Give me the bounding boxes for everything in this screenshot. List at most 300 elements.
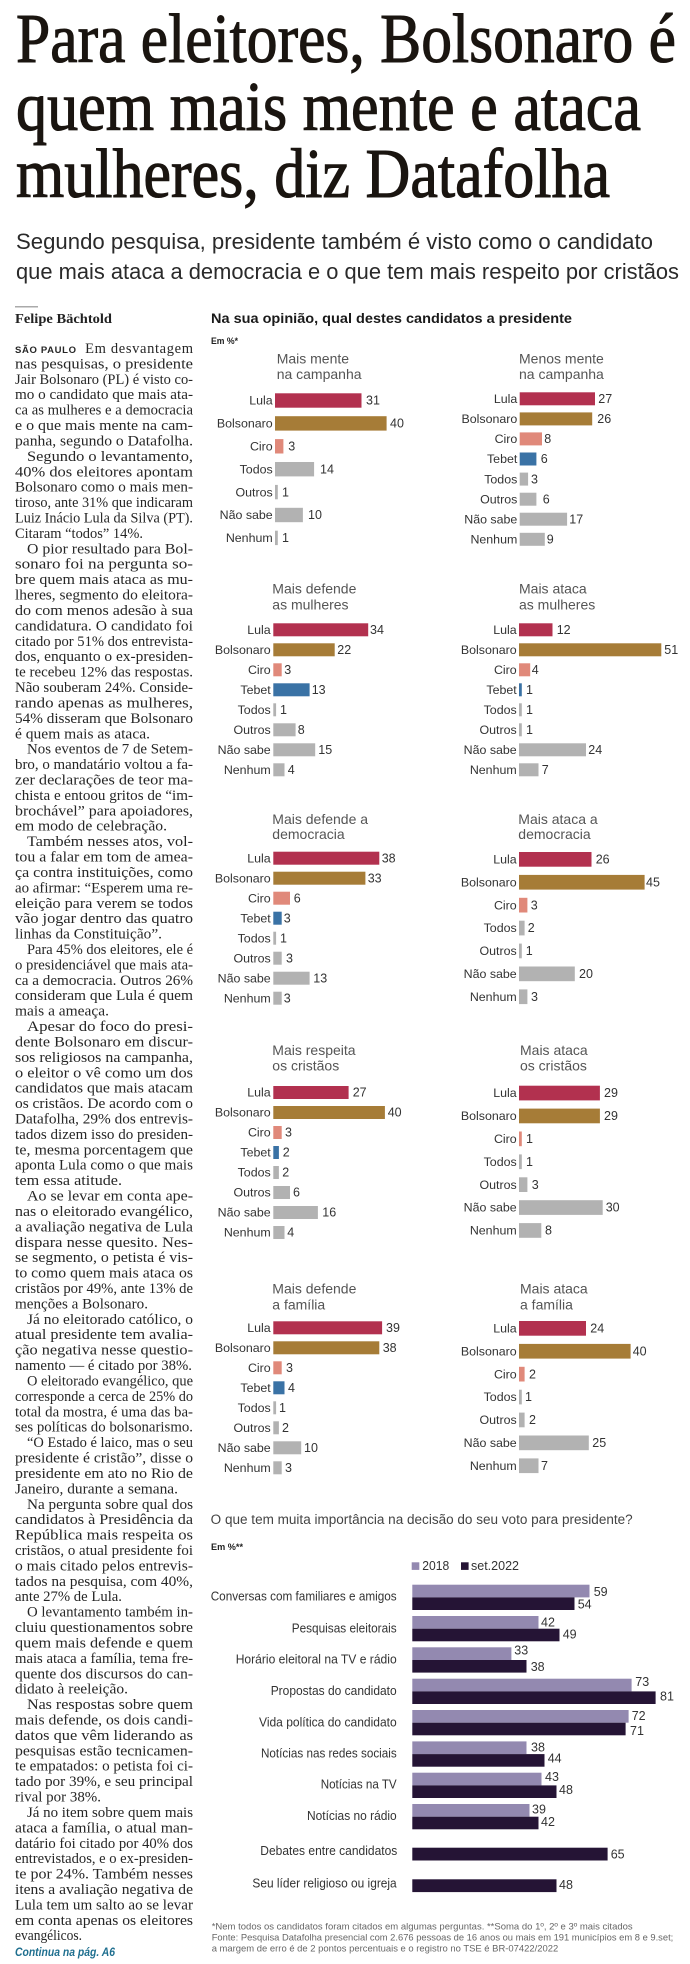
article text: República mais respeita os bbox=[15, 1528, 193, 1544]
article text: Luiz Inácio Lula da Silva (PT). bbox=[15, 510, 193, 526]
chart: Mais ataca a família: 7 bbox=[541, 1459, 548, 1473]
article text: sonaro foi na pergunta so- bbox=[15, 557, 193, 573]
article text: te recebeu 12% das respostas. bbox=[15, 665, 193, 681]
chart: Menos mente na campanha: 6 bbox=[543, 492, 550, 506]
chart: Mais respeita os cristãos: Nenhum bbox=[224, 1226, 271, 1240]
chart: Mais mente na campanha: 40 bbox=[390, 417, 404, 431]
chart: Mais ataca os cristãos: os cristãos bbox=[520, 1058, 587, 1074]
chart: importância na decisão do voto: 73 bbox=[635, 1675, 649, 1689]
article text: pesquisas estão tecnicamen- bbox=[15, 1743, 193, 1759]
legend: 2018 bbox=[422, 1559, 449, 1573]
chart: Mais ataca as mulheres: Outros bbox=[480, 723, 517, 737]
article text: bre quem mais ataca as mu- bbox=[15, 572, 193, 588]
article text: datos que vêm liderando as bbox=[15, 1728, 193, 1744]
chart: Mais ataca a democracia: democracia bbox=[518, 826, 591, 842]
chart: Mais ataca as mulheres: as mulheres bbox=[519, 596, 595, 612]
chart: Mais defende a democracia: 3 bbox=[286, 951, 293, 965]
chart: Mais defende a família: Bolsonaro bbox=[215, 1341, 271, 1355]
chart: Mais mente na campanha: Ciro bbox=[250, 440, 273, 454]
chart: Mais defende a democracia: Não sabe bbox=[218, 971, 271, 985]
chart: importância na decisão do voto: Horário eleitoral na TV e rádio bbox=[236, 1653, 397, 1667]
chart: Mais ataca os cristãos: Não sabe bbox=[464, 1201, 517, 1215]
chart: Mais mente na campanha: 14 bbox=[320, 462, 334, 476]
chart: importância na decisão do voto bbox=[211, 1585, 674, 1892]
chart: Mais defende as mulheres: 22 bbox=[337, 643, 351, 657]
chart: Mais ataca as mulheres: 1 bbox=[526, 723, 533, 737]
footnote: a margem de erro é de 2 pontos percentuais e o registro no TSE é BR-07422/2022 bbox=[212, 1944, 558, 1955]
article text: namento — é citado por 38%. bbox=[15, 1358, 192, 1374]
chart: Mais ataca os cristãos: Nenhum bbox=[470, 1224, 517, 1238]
chart: Mais ataca as mulheres: 1 bbox=[526, 703, 533, 717]
chart: Mais defende as mulheres: Todos bbox=[238, 703, 271, 717]
chart: importância na decisão do voto: Notícias nas redes sociais bbox=[261, 1746, 397, 1760]
chart: Mais defende a família: Ciro bbox=[248, 1361, 271, 1375]
chart: Mais mente na campanha: Não sabe bbox=[220, 508, 273, 522]
article text: a avaliação negativa de Lula bbox=[15, 1219, 194, 1235]
chart: Mais defende a democracia: Outros bbox=[234, 951, 271, 965]
chart: Mais respeita os cristãos: 4 bbox=[287, 1226, 294, 1240]
chart: importância na decisão do voto: 59 bbox=[594, 1585, 608, 1599]
chart: Mais respeita os cristãos: Mais respeita bbox=[272, 1042, 356, 1058]
article text: é quem mais as ataca. bbox=[15, 726, 150, 742]
article text: e o que mais mente na cam- bbox=[15, 418, 193, 434]
chart: Mais defende a família: Nenhum bbox=[224, 1461, 271, 1475]
article text: O pior resultado para Bol- bbox=[27, 541, 193, 557]
chart: Mais ataca a democracia: 3 bbox=[531, 898, 538, 912]
chart: Mais mente na campanha: 1 bbox=[282, 485, 289, 499]
chart: Mais ataca a família: Nenhum bbox=[470, 1459, 517, 1473]
article text: ca a democracia. Outros 26% bbox=[15, 973, 193, 989]
article text: zer declarações de teor ma- bbox=[15, 772, 193, 788]
chart: Mais mente na campanha: Todos bbox=[240, 462, 273, 476]
chart: Mais ataca os cristãos: Bolsonaro bbox=[461, 1109, 517, 1123]
chart: Mais ataca as mulheres: 12 bbox=[557, 623, 571, 637]
chart: Mais mente na campanha: 1 bbox=[282, 531, 289, 545]
chart: Mais respeita os cristãos bbox=[215, 1042, 402, 1240]
article text: rival por 38%. bbox=[15, 1790, 101, 1806]
chart: Mais mente na campanha: 3 bbox=[288, 440, 295, 454]
chart: Mais mente na campanha: na campanha bbox=[277, 366, 362, 382]
chart: importância na decisão do voto: 48 bbox=[559, 1878, 573, 1892]
chart: Menos mente na campanha: Menos mente bbox=[519, 350, 604, 366]
chart: Mais defende a família: a família bbox=[272, 1296, 325, 1312]
chart: Mais ataca a família: 40 bbox=[633, 1344, 647, 1358]
article text: to como quem mais ataca os bbox=[15, 1266, 193, 1282]
chart: importância na decisão do voto: Notícias na TV bbox=[321, 1778, 397, 1792]
article text: linhas da Constituição”. bbox=[15, 927, 162, 943]
article text: tado por 39%, e seu principal bbox=[15, 1774, 193, 1790]
article text: te empatados: o petista foi ci- bbox=[15, 1759, 193, 1775]
chart: Mais respeita os cristãos: Bolsonaro bbox=[215, 1106, 271, 1120]
chart: importância na decisão do voto: 72 bbox=[632, 1709, 646, 1723]
article text: rando apenas as mulheres, bbox=[15, 695, 193, 711]
chart: Mais mente na campanha: Outros bbox=[236, 485, 273, 499]
chart: Mais ataca a família: 1 bbox=[525, 1390, 532, 1404]
chart: importância na decisão do voto: Seu líder religioso ou igreja bbox=[252, 1876, 397, 1890]
article text: menções a Bolsonaro. bbox=[15, 1296, 148, 1312]
chart: importância na decisão do voto: 33 bbox=[514, 1643, 528, 1657]
chart: Mais ataca a democracia: 20 bbox=[579, 967, 593, 981]
article text: tiroso, ante 31% que indicaram bbox=[15, 495, 194, 511]
article text: mais a ameaça. bbox=[15, 1004, 109, 1020]
article text: tados na pesquisa, com 40%, bbox=[15, 1574, 193, 1590]
chart: Menos mente na campanha: Outros bbox=[480, 492, 517, 506]
footnote: Fonte: Pesquisa Datafolha presencial com 2.676 pessoas de 16 anos ou mais em 191 municípios em 8 e 9.set; bbox=[212, 1933, 673, 1944]
chart: Mais ataca a família: Bolsonaro bbox=[461, 1344, 517, 1358]
subtitle: Segundo pesquisa, presidente também é visto como o candidato bbox=[16, 229, 653, 254]
chart: importância na decisão do voto: 81 bbox=[660, 1690, 674, 1704]
second chart unit note: Em %** bbox=[211, 1542, 244, 1552]
chart: Mais ataca os cristãos: Todos bbox=[484, 1155, 517, 1169]
article text: cristãos, o atual presidente foi bbox=[15, 1543, 193, 1559]
chart: Mais defende as mulheres: 34 bbox=[370, 623, 384, 637]
chart: Menos mente na campanha: 9 bbox=[547, 532, 554, 546]
chart: Mais defende a democracia: 38 bbox=[382, 851, 396, 865]
article text: ça contra instituições, como bbox=[15, 865, 193, 881]
chart: Mais defende a família: 38 bbox=[383, 1341, 397, 1355]
chart: Mais ataca a família: 2 bbox=[529, 1367, 536, 1381]
article text: presidente é cristão”, disse o bbox=[15, 1450, 193, 1466]
chart: importância na decisão do voto: 42 bbox=[541, 1616, 555, 1630]
chart: Mais ataca os cristãos: 3 bbox=[532, 1178, 539, 1192]
chart: Mais ataca a família: Ciro bbox=[494, 1367, 517, 1381]
article text: dos, enquanto o ex-presiden- bbox=[15, 649, 193, 665]
chart: Menos mente na campanha: Ciro bbox=[495, 432, 517, 446]
article text: chista e entoou gritos de “im- bbox=[15, 788, 193, 804]
chart: Mais respeita os cristãos: 27 bbox=[353, 1086, 367, 1100]
chart: Mais defende as mulheres: Não sabe bbox=[218, 743, 271, 757]
chart: Mais defende a democracia: 33 bbox=[368, 871, 382, 885]
article text: dente Bolsonaro em discur- bbox=[15, 1034, 193, 1050]
chart: Mais defende as mulheres: as mulheres bbox=[272, 596, 349, 612]
article text: em conta apenas os eleitores bbox=[15, 1913, 193, 1929]
chart: Mais defende as mulheres: 8 bbox=[298, 723, 305, 737]
chart: Menos mente na campanha bbox=[462, 350, 612, 546]
chart: Mais ataca os cristãos: Lula bbox=[493, 1086, 517, 1100]
chart: Mais defende as mulheres: 15 bbox=[318, 743, 332, 757]
chart: Mais ataca a família: 2 bbox=[529, 1413, 536, 1427]
chart: Mais ataca os cristãos: 29 bbox=[604, 1109, 618, 1123]
chart: Mais defende a democracia: Tebet bbox=[240, 911, 271, 925]
byline bbox=[15, 306, 112, 327]
chart: Mais ataca as mulheres: Lula bbox=[493, 623, 517, 637]
chart: Mais defende as mulheres: Nenhum bbox=[224, 763, 271, 777]
chart: Mais ataca a democracia: Lula bbox=[493, 852, 517, 866]
article text: Já no item sobre quem mais bbox=[27, 1805, 193, 1821]
chart: Mais defende a democracia: 1 bbox=[280, 931, 287, 945]
chart: Mais mente na campanha: 31 bbox=[366, 394, 380, 408]
chart: Mais ataca a democracia: Nenhum bbox=[470, 990, 517, 1004]
chart: Mais defende a família: Não sabe bbox=[218, 1441, 271, 1455]
article text: didato à reeleição. bbox=[15, 1682, 128, 1698]
article text: SÃO PAULO Em desvantagem bbox=[15, 341, 194, 357]
chart: Menos mente na campanha: 8 bbox=[544, 432, 551, 446]
chart: Mais ataca as mulheres: Nenhum bbox=[470, 763, 517, 777]
article text: itens a avaliação negativa de bbox=[15, 1882, 193, 1898]
article text: atual presidente tem avalia- bbox=[15, 1327, 193, 1343]
chart: Mais ataca a família: a família bbox=[520, 1296, 573, 1312]
article text: cluiu questionamentos sobre bbox=[15, 1620, 193, 1636]
article text: do com menos adesão à sua bbox=[15, 603, 194, 619]
article text: 40% dos eleitores apontam bbox=[15, 464, 194, 480]
chart: Mais ataca as mulheres: Bolsonaro bbox=[461, 643, 517, 657]
chart: Mais defende as mulheres: Outros bbox=[234, 723, 271, 737]
chart: Menos mente na campanha: Lula bbox=[494, 392, 517, 406]
article text: entrevistados, e o ex-presiden- bbox=[15, 1851, 193, 1867]
chart: Menos mente na campanha: Bolsonaro bbox=[462, 412, 517, 426]
chart: Mais respeita os cristãos: 2 bbox=[282, 1166, 289, 1180]
article text: o eleitor o vê como um dos bbox=[15, 1065, 193, 1081]
chart: Mais defende a democracia: Lula bbox=[247, 851, 271, 865]
chart: importância na decisão do voto: 71 bbox=[630, 1724, 644, 1738]
chart: Mais defende a democracia bbox=[215, 811, 396, 1005]
chart: Mais ataca os cristãos: 29 bbox=[604, 1086, 618, 1100]
chart: Mais defende as mulheres: Tebet bbox=[240, 683, 271, 697]
chart: Mais ataca as mulheres: 24 bbox=[588, 743, 602, 757]
article text: quem mais defende e quem bbox=[15, 1635, 194, 1651]
chart: Mais defende a democracia: Bolsonaro bbox=[215, 871, 271, 885]
chart: Mais ataca a família: Não sabe bbox=[464, 1436, 517, 1450]
article text: em modo de celebração. bbox=[15, 819, 167, 835]
article text: Na pergunta sobre qual dos bbox=[27, 1497, 193, 1513]
chart: Mais defende a família: 3 bbox=[285, 1461, 292, 1475]
chart: importância na decisão do voto: 42 bbox=[541, 1815, 555, 1829]
chart: Mais defende as mulheres: 1 bbox=[280, 703, 287, 717]
article text: ataca a família, o atual man- bbox=[15, 1820, 193, 1836]
article text: Jair Bolsonaro (PL) é visto co- bbox=[15, 372, 193, 388]
article text: tou a falar em tom de amea- bbox=[15, 850, 193, 866]
chart: Mais ataca os cristãos: 8 bbox=[545, 1224, 552, 1238]
article text: panha, segundo o Datafolha. bbox=[15, 434, 193, 450]
article text: Nas respostas sobre quem bbox=[27, 1697, 194, 1713]
chart: importância na decisão do voto: 49 bbox=[563, 1628, 577, 1642]
chart: Mais respeita os cristãos: Lula bbox=[247, 1086, 271, 1100]
footnote bbox=[212, 1921, 673, 1955]
chart: Mais respeita os cristãos: 2 bbox=[283, 1146, 290, 1160]
article text: te por 24%. Também nesses bbox=[15, 1867, 193, 1883]
article text: Ao se levar em conta ape- bbox=[27, 1189, 193, 1205]
article text: quente dos discursos do can- bbox=[15, 1666, 193, 1682]
chart section heading: Na sua opinião, qual destes candidatos a presidente bbox=[211, 310, 572, 326]
article text: tem essa atitude. bbox=[15, 1173, 122, 1189]
article text: Lula tem um salto ao se levar bbox=[15, 1897, 193, 1913]
second chart heading: O que tem muita importância na decisão do seu voto para presidente? bbox=[211, 1512, 633, 1527]
article text: consideram que Lula é quem bbox=[15, 988, 194, 1004]
chart: Mais ataca a democracia: 3 bbox=[531, 990, 538, 1004]
article text: 54% disseram que Bolsonaro bbox=[15, 711, 193, 727]
chart: Mais ataca os cristãos: Ciro bbox=[494, 1132, 517, 1146]
chart: Mais ataca a democracia: Bolsonaro bbox=[461, 875, 517, 889]
chart: Mais defende a família: Outros bbox=[234, 1421, 271, 1435]
chart: Mais defende a família: Mais defende bbox=[272, 1280, 357, 1296]
chart: Mais respeita os cristãos: Outros bbox=[234, 1186, 271, 1200]
chart: Mais mente na campanha: Bolsonaro bbox=[217, 417, 273, 431]
article text: ante 27% de Lula. bbox=[15, 1589, 122, 1605]
unit note: Em %* bbox=[211, 336, 238, 346]
chart: Menos mente na campanha: Nenhum bbox=[470, 532, 517, 546]
chart: Mais defende a democracia: Ciro bbox=[248, 891, 271, 905]
chart: Mais mente na campanha: Mais mente bbox=[277, 350, 349, 366]
article text: ção negativa nesse questio- bbox=[15, 1343, 193, 1359]
chart: Mais respeita os cristãos: 16 bbox=[322, 1206, 336, 1220]
chart: importância na decisão do voto: Debates entre candidatos bbox=[260, 1844, 397, 1858]
article text: Também nesses atos, vol- bbox=[27, 834, 193, 850]
byline: Felipe Bächtold bbox=[15, 312, 112, 327]
article text: datário foi citado por 40% dos bbox=[15, 1836, 193, 1852]
article text: dispara nesse quesito. Nes- bbox=[15, 1235, 193, 1251]
article text: Datafolha, 29% dos entrevis- bbox=[15, 1112, 193, 1128]
chart: importância na decisão do voto: 54 bbox=[578, 1597, 592, 1611]
chart: Mais defende as mulheres: 3 bbox=[284, 663, 291, 677]
continuation note: Continua na pág. A6 bbox=[15, 1945, 115, 1959]
chart: Mais ataca a família: 24 bbox=[590, 1322, 604, 1336]
chart: Mais defende as mulheres bbox=[215, 580, 384, 777]
article text: o mais citado pelos entrevis- bbox=[15, 1558, 193, 1574]
article text: mo o candidato que mais ata- bbox=[15, 387, 193, 403]
subtitle: que mais ataca a democracia e o que tem mais respeito por cristãos bbox=[16, 259, 679, 284]
chart: importância na decisão do voto: 44 bbox=[548, 1752, 562, 1766]
chart: Mais ataca a democracia: 45 bbox=[646, 875, 660, 889]
chart: Mais ataca os cristãos: 1 bbox=[526, 1155, 533, 1169]
title bbox=[16, 1, 676, 213]
chart: Mais ataca as mulheres: Ciro bbox=[494, 663, 517, 677]
chart: Mais defende a democracia: 13 bbox=[313, 971, 327, 985]
article text: bro, o mandatário voltou a fa- bbox=[15, 757, 193, 773]
chart: Mais ataca os cristãos: 30 bbox=[606, 1201, 620, 1215]
chart: Mais respeita os cristãos: os cristãos bbox=[272, 1058, 339, 1074]
chart: Mais ataca os cristãos: Mais ataca bbox=[520, 1042, 588, 1058]
chart: Mais respeita os cristãos: 40 bbox=[388, 1106, 402, 1120]
chart: Mais ataca as mulheres: Tebet bbox=[486, 683, 517, 697]
chart: Mais ataca as mulheres bbox=[461, 580, 678, 777]
article text: candidatos à Presidência da bbox=[15, 1512, 194, 1528]
chart: Menos mente na campanha: na campanha bbox=[519, 366, 604, 382]
footnote: *Nem todos os candidatos foram citados em algumas perguntas. **Soma do 1º, 2º e 3º mais citados bbox=[212, 1921, 633, 1932]
chart: Mais defende as mulheres: Mais defende bbox=[272, 580, 357, 596]
article text: vão jogar dentro das quatro bbox=[15, 911, 193, 927]
article text: Para 45% dos eleitores, ele é bbox=[27, 942, 193, 958]
article text: total da mostra, é uma das ba- bbox=[15, 1404, 193, 1420]
chart: Mais ataca a família: Lula bbox=[493, 1322, 517, 1336]
legend: set.2022 bbox=[471, 1559, 519, 1573]
chart: Mais respeita os cristãos: Não sabe bbox=[218, 1206, 271, 1220]
chart: Menos mente na campanha: Tebet bbox=[487, 452, 518, 466]
chart: Menos mente na campanha: Não sabe bbox=[464, 512, 517, 526]
chart: Menos mente na campanha: 6 bbox=[541, 452, 548, 466]
article text: evangélicos. bbox=[15, 1928, 82, 1944]
chart: Mais ataca os cristãos: Outros bbox=[480, 1178, 517, 1192]
article text: o presidenciável que mais ata- bbox=[15, 957, 193, 973]
article text: candidatos que mais atacam bbox=[15, 1081, 194, 1097]
article text: “O Estado é laico, mas o seu bbox=[27, 1435, 193, 1451]
chart: Menos mente na campanha: 27 bbox=[598, 392, 612, 406]
article text: Janeiro, durante a semana. bbox=[15, 1481, 178, 1497]
chart: Mais mente na campanha: 10 bbox=[308, 508, 322, 522]
chart: Mais defende a família bbox=[215, 1280, 400, 1475]
chart: Mais defende a família: 10 bbox=[304, 1441, 318, 1455]
chart: Mais respeita os cristãos: Ciro bbox=[248, 1126, 271, 1140]
chart: importância na decisão do voto: Vida política do candidato bbox=[259, 1715, 397, 1729]
chart: Menos mente na campanha: 26 bbox=[597, 412, 611, 426]
chart: Mais respeita os cristãos: Todos bbox=[238, 1166, 271, 1180]
chart: importância na decisão do voto: 38 bbox=[531, 1741, 545, 1755]
chart: Mais defende a família: 4 bbox=[288, 1381, 295, 1395]
chart: importância na decisão do voto: 48 bbox=[559, 1783, 573, 1797]
chart: Mais ataca a democracia: 1 bbox=[526, 944, 533, 958]
article text: se segmento, o petista é vis- bbox=[15, 1250, 193, 1266]
chart: Mais defende a democracia: democracia bbox=[272, 826, 345, 842]
article text: Não souberam 24%. Conside- bbox=[15, 680, 193, 696]
article text: Bolsonaro como o mais men- bbox=[15, 480, 193, 496]
chart: Mais ataca as mulheres: 7 bbox=[542, 763, 549, 777]
article text: Nos eventos de 7 de Setem- bbox=[27, 742, 193, 758]
chart: Mais defende a família: 3 bbox=[286, 1361, 293, 1375]
article text: os cristãos. De acordo com o bbox=[15, 1096, 193, 1112]
chart: Mais defende a democracia: 3 bbox=[284, 991, 291, 1005]
article text: ses políticas do bolsonarismo. bbox=[15, 1420, 193, 1436]
chart: Mais ataca a família: 25 bbox=[592, 1436, 606, 1450]
chart: Mais ataca as mulheres: 51 bbox=[664, 643, 678, 657]
legend bbox=[412, 1559, 519, 1573]
chart: Mais ataca a família: Todos bbox=[484, 1390, 517, 1404]
article text: nas o eleitorado evangélico, bbox=[15, 1204, 193, 1220]
chart: Mais ataca a democracia: Outros bbox=[480, 944, 517, 958]
chart: Mais ataca a democracia: 2 bbox=[528, 921, 535, 935]
article text bbox=[15, 341, 194, 1944]
chart: importância na decisão do voto: Conversas com familiares e amigos bbox=[211, 1590, 397, 1604]
chart: importância na decisão do voto: 38 bbox=[531, 1660, 545, 1674]
article text: presidente em ato no Rio de bbox=[15, 1466, 193, 1482]
article text: O eleitorado evangélico, que bbox=[27, 1374, 193, 1390]
chart: Mais ataca as mulheres: 4 bbox=[532, 663, 539, 677]
chart: Mais defende as mulheres: 13 bbox=[312, 683, 326, 697]
chart: Mais ataca a democracia: Todos bbox=[484, 921, 517, 935]
chart: Mais defende a democracia: Mais defende a bbox=[272, 811, 368, 827]
article text: candidatura. O candidato foi bbox=[15, 618, 193, 634]
chart: Mais defende as mulheres: 4 bbox=[288, 763, 295, 777]
chart: Mais mente na campanha: Lula bbox=[249, 394, 273, 408]
chart: Mais defende a democracia: Nenhum bbox=[224, 991, 271, 1005]
article text: corresponde a cerca de 25% do bbox=[15, 1389, 193, 1405]
chart: Mais defende as mulheres: Lula bbox=[247, 623, 271, 637]
chart: Mais ataca os cristãos: 1 bbox=[526, 1132, 533, 1146]
article text: te, mesma porcentagem que bbox=[15, 1142, 193, 1158]
title: mulheres, diz Datafolha bbox=[16, 136, 610, 213]
article text: eleição para verem se todos bbox=[15, 896, 193, 912]
chart: importância na decisão do voto: Propostas do candidato bbox=[271, 1684, 397, 1698]
chart: Mais defende a democracia: Todos bbox=[238, 931, 271, 945]
chart: Mais ataca os cristãos bbox=[461, 1042, 620, 1238]
article text: nas pesquisas, o presidente bbox=[15, 356, 193, 372]
chart: Mais ataca a democracia: Ciro bbox=[494, 898, 517, 912]
chart: importância na decisão do voto: 43 bbox=[545, 1770, 559, 1784]
chart: importância na decisão do voto: 65 bbox=[611, 1847, 625, 1861]
chart: Mais ataca a democracia: Não sabe bbox=[464, 967, 517, 981]
chart: Mais defende a democracia: 3 bbox=[284, 911, 291, 925]
chart: Mais ataca as mulheres: Não sabe bbox=[464, 743, 517, 757]
chart: Mais ataca as mulheres: Mais ataca bbox=[519, 580, 587, 596]
chart: Menos mente na campanha: 17 bbox=[569, 512, 583, 526]
article text: sos religiosos na campanha, bbox=[15, 1050, 193, 1066]
subtitle bbox=[16, 229, 679, 284]
article text: citado por 51% dos entrevista- bbox=[15, 634, 193, 650]
article text: ao afirmar: “Esperem uma re- bbox=[15, 880, 193, 896]
chart: Mais ataca a democracia: Mais ataca a bbox=[518, 811, 598, 827]
chart: Mais defende as mulheres: Bolsonaro bbox=[215, 643, 271, 657]
article text: aponta Lula como o que mais bbox=[15, 1158, 193, 1174]
chart: Menos mente na campanha: Todos bbox=[484, 472, 517, 486]
article text: Segundo o levantamento, bbox=[27, 449, 193, 465]
